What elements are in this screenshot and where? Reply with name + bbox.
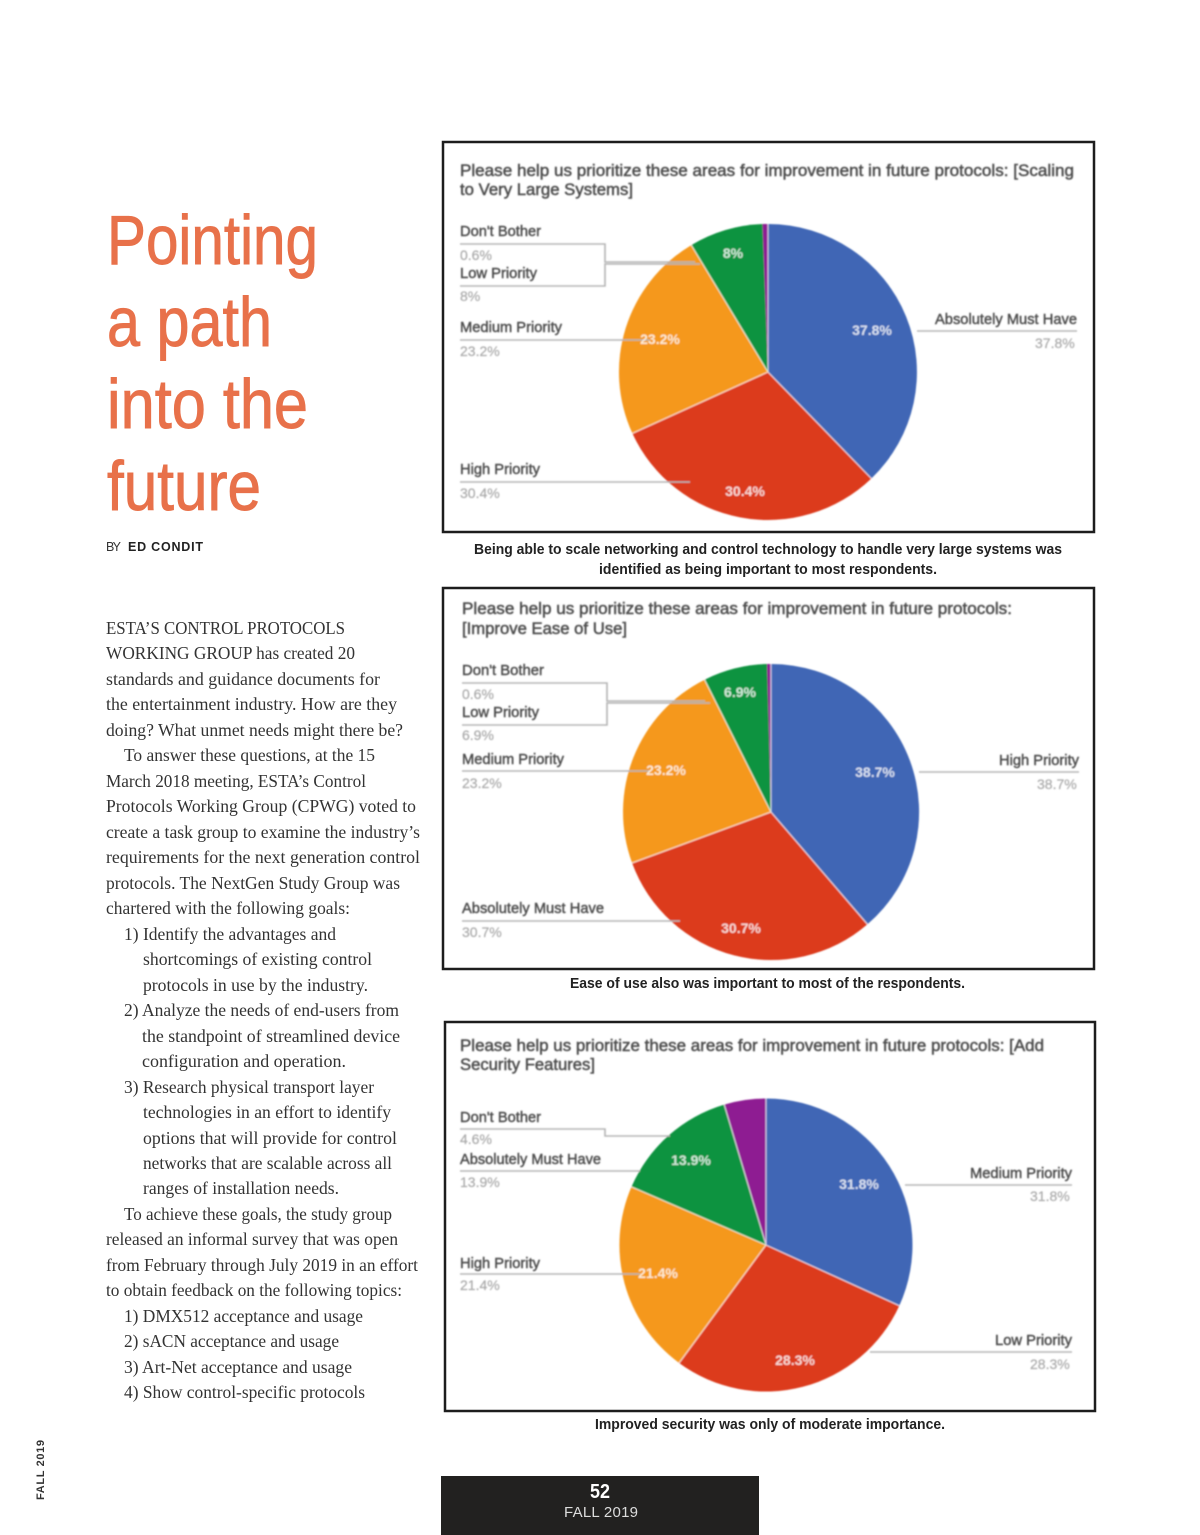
article body text: 1) DMX512 acceptance and usage: [124, 1306, 363, 1327]
slice labels: 23.2%: [460, 343, 500, 359]
slice labels: 6.9%: [724, 684, 757, 700]
slice labels: [462, 663, 1080, 940]
panel: chart improve ease of use: [443, 588, 1094, 969]
pie chart: [619, 224, 917, 520]
chart title: [Improve Ease of Use]: [462, 619, 627, 638]
article body text: create a task group to examine the industry’s: [106, 822, 420, 842]
panel: chart add security features: [445, 1022, 1095, 1411]
slice labels: High Priority: [460, 462, 541, 478]
slice labels: 21.4%: [460, 1277, 500, 1293]
caption: chart one: Being able to scale networking and control technology to handle very large systems was: [474, 541, 1062, 558]
article body text: configuration and operation.: [142, 1051, 346, 1071]
slice labels: 23.2%: [462, 775, 502, 791]
article body text: networks that are scalable across all: [143, 1153, 392, 1173]
slice labels: Medium Priority: [970, 1166, 1073, 1182]
chart title: Please help us prioritize these areas for improvement in future protocols:: [462, 599, 1012, 618]
chart title: [460, 161, 1074, 199]
chart title: [460, 1036, 1044, 1074]
slice labels: High Priority: [999, 753, 1080, 769]
title: Pointing: [107, 201, 318, 279]
title: future: [107, 447, 261, 525]
article body text: options that will provide for control: [143, 1128, 397, 1148]
footer page number block: 52: [590, 1481, 610, 1503]
chart title: to Very Large Systems]: [460, 180, 633, 199]
slice labels: Low Priority: [995, 1333, 1073, 1349]
slice labels: Low Priority: [460, 266, 538, 282]
leader lines: [460, 244, 1077, 482]
slice labels: High Priority: [460, 1256, 541, 1272]
caption: chart one: identified as being important to most respondents.: [599, 561, 937, 578]
article body text: 2) Analyze the needs of end-users from: [124, 1000, 399, 1021]
article body text: shortcomings of existing control: [143, 949, 372, 969]
slice labels: 37.8%: [852, 322, 892, 338]
leader lines: [462, 683, 1079, 921]
side issue label: FALL 2019: [35, 1440, 47, 1500]
caption: chart one: [474, 541, 1062, 578]
slice labels: Don't Bother: [462, 663, 544, 679]
article body text: ranges of installation needs.: [143, 1178, 339, 1198]
chart title: Security Features]: [460, 1055, 595, 1074]
slice labels: [460, 1110, 1073, 1372]
article body text: technologies in an effort to identify: [143, 1102, 391, 1122]
article body text: WORKING GROUP has created 20: [106, 643, 355, 663]
article body text: To achieve these goals, the study group: [124, 1204, 392, 1224]
slice labels: Low Priority: [462, 705, 540, 721]
slice labels: Don't Bother: [460, 1110, 541, 1126]
slice labels: 8%: [723, 245, 744, 261]
article body text: standards and guidance documents for: [106, 669, 380, 689]
article body text: Protocols Working Group (CPWG) voted to: [106, 796, 416, 817]
article body text: doing? What unmet needs might there be?: [106, 720, 403, 740]
slice labels: 38.7%: [1037, 776, 1077, 792]
article body text: requirements for the next generation control: [106, 847, 420, 867]
article body text: [106, 618, 420, 1403]
article body text: ESTA’S CONTROL PROTOCOLS: [106, 618, 345, 638]
article body text: chartered with the following goals:: [106, 898, 350, 918]
chart title: [462, 599, 1012, 638]
byline: ED CONDIT: [128, 540, 203, 554]
byline: BY: [106, 540, 122, 554]
slice labels: 13.9%: [671, 1152, 711, 1168]
slice labels: 8%: [460, 288, 480, 304]
leader lines: [460, 1129, 1072, 1352]
article body text: to obtain feedback on the following topics:: [106, 1280, 402, 1300]
slice labels: Don't Bother: [460, 224, 541, 240]
slice labels: 31.8%: [839, 1176, 879, 1192]
article body text: To answer these questions, at the 15: [124, 745, 375, 765]
slice labels: 31.8%: [1030, 1188, 1070, 1204]
pie chart: [623, 664, 919, 960]
slice labels: 38.7%: [855, 764, 895, 780]
slice labels: 30.7%: [462, 924, 502, 940]
chart title: Please help us prioritize these areas for improvement in future protocols: [Add: [460, 1036, 1044, 1055]
slice labels: 0.6%: [460, 247, 492, 263]
slice labels: 21.4%: [638, 1265, 678, 1281]
article body text: protocols. The NextGen Study Group was: [106, 873, 400, 893]
caption: chart three: Improved security was only of moderate importance.: [595, 1416, 945, 1433]
slice labels: 30.4%: [725, 483, 765, 499]
article body text: 2) sACN acceptance and usage: [124, 1331, 339, 1352]
slice labels: 30.7%: [721, 920, 761, 936]
slice labels: 23.2%: [646, 762, 686, 778]
slice labels: 30.4%: [460, 485, 500, 501]
slice labels: 28.3%: [1030, 1356, 1070, 1372]
slice labels: 0.6%: [462, 686, 494, 702]
slice labels: Absolutely Must Have: [462, 901, 604, 917]
panel: chart scaling to very large systems: [443, 142, 1094, 532]
footer page number block: [441, 1476, 759, 1535]
slice labels: 28.3%: [775, 1352, 815, 1368]
slice labels: Medium Priority: [460, 320, 563, 336]
slice labels: 23.2%: [640, 331, 680, 347]
article body text: March 2018 meeting, ESTA’s Control: [106, 771, 366, 791]
article body text: released an informal survey that was open: [106, 1229, 398, 1249]
article body text: 1) Identify the advantages and: [124, 924, 336, 945]
title: into the: [107, 365, 308, 443]
pie chart: [619, 1098, 912, 1392]
title: [107, 201, 318, 525]
article body text: the entertainment industry. How are they: [106, 694, 397, 714]
article body text: from February through July 2019 in an effort: [106, 1255, 418, 1275]
caption: chart two: Ease of use also was important to most of the respondents.: [570, 975, 965, 992]
article body text: protocols in use by the industry.: [143, 975, 368, 995]
slice labels: Medium Priority: [462, 752, 565, 768]
article body text: 4) Show control-specific protocols: [124, 1382, 365, 1403]
slice labels: Absolutely Must Have: [935, 312, 1077, 328]
chart title: Please help us prioritize these areas for improvement in future protocols: [Scaling: [460, 161, 1074, 180]
title: a path: [107, 283, 272, 361]
slice labels: Absolutely Must Have: [460, 1152, 601, 1168]
slice labels: 6.9%: [462, 727, 494, 743]
slice labels: 4.6%: [460, 1131, 492, 1147]
slice labels: 13.9%: [460, 1174, 500, 1190]
article body text: the standpoint of streamlined device: [142, 1026, 400, 1046]
footer page number block: FALL 2019: [564, 1504, 638, 1521]
article body text: 3) Art-Net acceptance and usage: [124, 1357, 352, 1378]
article body text: 3) Research physical transport layer: [124, 1077, 374, 1098]
slice labels: [460, 224, 1077, 501]
slice labels: 37.8%: [1035, 335, 1075, 351]
